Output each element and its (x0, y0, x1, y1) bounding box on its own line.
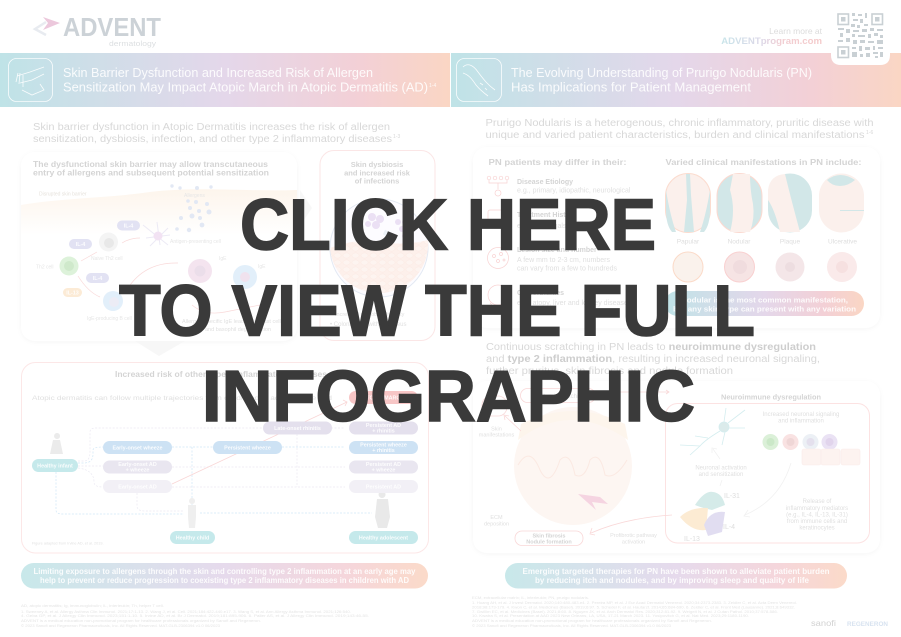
keratinocytes (802, 449, 860, 465)
pill: persistent AD + wheeze: + wheeze (372, 468, 395, 474)
pill: early-onset wheeze: Early-onset wheeze (112, 446, 163, 452)
pill: healthy infant: Healthy infant (37, 464, 73, 470)
bullets (330, 312, 406, 328)
cytokine clusters (680, 492, 740, 543)
label: ECM deposition: deposition (484, 522, 509, 528)
pill: late-onset rhinitis (263, 422, 332, 434)
figure: adolescent (375, 491, 390, 528)
panel: skin dysbiosis (320, 150, 435, 340)
intro: Atopic dermatitis can follow multiple trajectories from childhood to adolescence and (32, 395, 332, 402)
item: disease etiology (517, 179, 631, 194)
heading: and increased risk (344, 168, 411, 178)
item: lesion size (517, 247, 617, 272)
pill: skin manifestations marker (482, 396, 507, 416)
label: release of mediators: (e.g., IL-4, IL-13, IL-31) (786, 512, 848, 518)
pill: persistent AD + rhinitis: Persistent AD (366, 423, 401, 429)
pill: healthy child: Healthy child (176, 536, 209, 542)
pill: early-onset AD + wheeze: + wheeze (126, 468, 149, 474)
label: increased signaling: Increased neuronal signaling (763, 412, 839, 418)
allergens (170, 184, 213, 232)
overlay headline: click here to view the full infographic: INFOGRAPHIC (202, 357, 695, 437)
pill: skin fibrosis (515, 531, 583, 546)
figure: child (188, 498, 196, 528)
callout: left takeaway: Limiting exposure to allergens through the skin and controlling type 2 inflammation at an early age may (34, 566, 416, 576)
icon: treatment history (488, 210, 508, 224)
item: treatment history (517, 212, 595, 230)
banner: skin barrier: 1-4 (429, 83, 436, 89)
item: lesion size: A few mm to 2-3 cm, numbers (517, 257, 610, 264)
bullets: Increased microbial diversity (335, 312, 405, 318)
footer: right references: 1. Huang AH, et al. J Invest Dermatol. 2020;140:480-483.e4. 2. Pereira MP, et al. J Eur Acad Dermatol Venereol. 2020;34:2373-2383. 3. Zeidler C, et al. Acta Derm Venereol. (472, 601, 797, 605)
photo: plaque (768, 174, 812, 232)
pill: healthy child (170, 531, 215, 544)
labels: manifestation types: Ulcerative (828, 238, 857, 246)
learn more link: ADVENTprogram.com (721, 36, 822, 47)
overlay headline: click here to view the full infographic: CLICK HERE (240, 186, 656, 266)
panel: atopic march (22, 362, 428, 553)
footer: right references: 7. Gwillim EC, et al. Medicines (Basel). 2021;8:60. 8. Nguyen JK, et al. Arch Dermatol Res. 2020;312:81-92. 9. Weigelt N, et al. J Cutan Pathol. 2010;37:578-586. (472, 610, 778, 614)
caption: degranulation (182, 319, 281, 333)
pill: persistent AD + rhinitis: + rhinitis (372, 428, 395, 434)
heading: patients differ: PN patients may differ in their: (488, 158, 626, 167)
label: disrupted skin barrier: Disrupted skin barrier (39, 192, 87, 198)
heading: neuroimmune dysregulation: Neuroimmune dysregulation (721, 392, 821, 402)
footer: right references: ECM, extracellular matrix; IL, interleukin; PN, prurigo nodularis. (472, 596, 589, 600)
cytokine clusters: IL-31 (724, 493, 740, 500)
heading: of infections (355, 176, 399, 186)
label: neuronal activation (695, 466, 747, 478)
pill: persistent wheeze + rhinitis: Persistent wheeze (360, 442, 407, 448)
intro text: prurigo nodularis: unique and varied patient characteristics, burden and clinical manifestations (486, 130, 864, 141)
pill: nodular note: Nodular is the most common manifestation, (681, 296, 848, 304)
item: comorbidities (517, 290, 632, 307)
label: release of mediators: inflammatory mediators (786, 506, 848, 512)
top pill: itch-scratch (520, 388, 596, 402)
mast cell and basophil: IgE (258, 264, 266, 270)
labels: manifestation types: Plaque (780, 238, 800, 246)
label: profibrotic: Profibrotic pathway (610, 533, 657, 539)
pill: persistent AD (349, 480, 418, 493)
cytokine clusters: IL-4 (723, 524, 735, 531)
pill: nodular note (665, 291, 864, 316)
banner: skin barrier (0, 53, 450, 107)
label: skin manifestations: Skin (491, 426, 502, 432)
label: release of mediators: Release of (803, 499, 832, 505)
heading: Skin dysbiosis (351, 160, 403, 169)
text block: continuous scratching: further pruritus, skin fibrosis and nodule formation (486, 366, 733, 377)
footer: left references (21, 604, 369, 628)
arrows: neuro (712, 448, 791, 517)
item: disease etiology: Disease Etiology (517, 179, 573, 186)
pill: healthy infant (32, 459, 78, 472)
label: profibrotic (610, 533, 657, 546)
banner: prurigo nodularis: Has Implications for Patient Management (511, 80, 751, 94)
footer: right references (472, 596, 797, 628)
IL-4 tags: IL-4 (76, 242, 85, 248)
skin microbiome circle (330, 199, 428, 297)
photo: ulcerative (819, 174, 864, 232)
heading: Increased risk of other type 2 inflammatory diseases (115, 370, 328, 379)
label: skin manifestations: manifestations (479, 432, 514, 438)
item: lesion size: Lesion size and number (517, 247, 597, 254)
label: release of mediators: from immune cells and (787, 519, 847, 525)
labels: manifestation types: Nodular (728, 238, 751, 246)
footer: left references: AD, atopic dermatitis; Ig, immunoglobulin; IL, interleukin; Th, helper T cell. (21, 604, 164, 608)
callout: right takeaway (505, 563, 847, 588)
labels: manifestation types: Papular (677, 238, 700, 246)
mast cell and basophil (188, 256, 266, 289)
panel: transcutaneous sensitization (21, 152, 312, 341)
flow lines (56, 400, 372, 514)
label: neuronal activation: Neuronal activation (695, 466, 747, 472)
label: increased signaling (763, 412, 839, 424)
caption: degranulation: Allergen-specific IgE leading to mast cell (182, 319, 281, 325)
intro text: atopic dermatitis (33, 122, 400, 145)
label: neuronal activation: and sensitization (699, 472, 743, 478)
pill: late-onset rhinitis: Late-onset rhinitis (274, 426, 321, 432)
labels: manifestation types (677, 238, 857, 246)
footer: left references: 1. Sweeney A, et al. Allergy Asthma Clin Immunol. 2021;17:1-13. 2. Wang J, et al. Cell. 2021;184:422-440.e17. 3. Wang S, et al. Ann Allergy Asthma Immunol. 2021;126:540. (21, 610, 351, 614)
pill: skin fibrosis: Skin fibrosis (532, 534, 566, 540)
footer: left references: 4. Geba GP, et al. J Allergy Clin Immunol. 2023;151:1-10. 5. Irvine AD, et al. Br J Dermatol. 2019;181:895-906. 6. Paller AS, et al. J Allergy Clin Immunol. 2019;143:46-55. (21, 614, 369, 618)
allergens: Allergens (184, 193, 205, 199)
panel: neuroimmune (473, 381, 880, 553)
label: skin manifestations (479, 426, 514, 438)
intro text: prurigo nodularis: Prurigo Nodularis is a heterogenous, chronic inflammatory, pruritic disease with (486, 118, 874, 129)
intro text: atopic dermatitis: Skin barrier dysfunction in Atopic Dermatitis increases the risk of allergen (33, 122, 390, 133)
banner: prurigo nodularis (451, 53, 901, 107)
pill: early-onset AD + wheeze: Early-onset AD (118, 462, 157, 468)
intro text: atopic dermatitis: sensitization, dysbiosis, infection, and other type 2 inflammatory diseases (33, 134, 392, 145)
heading: clinical manifestations: Varied clinical manifestations in PN include: (666, 158, 862, 167)
text block: continuous scratching: and type 2 inflammation , resulting in increased neuronal signaling, (486, 354, 820, 365)
icon: hand scratching arm (8, 58, 52, 102)
antigen-presenting cell (143, 222, 221, 246)
logo: Regeneron: REGENERON (847, 622, 888, 628)
footer: right references: 10. Kwatra S, et al. Presentation at AAD 2023 New Orleans, LA, USA, 17-21 March 2023. 11. Yosipovitch G, et al. Nat Med. 2023;29:1180-1190. (472, 614, 749, 618)
pill: persistent wheeze + rhinitis: + rhinitis (372, 448, 395, 454)
mast cell and basophil: IgE (219, 256, 227, 262)
logo: ADVENT dermatology: dermatology (109, 39, 156, 48)
IgE-producing B cell (87, 291, 132, 322)
icon: arm with nodules (456, 58, 502, 102)
label: ECM deposition: ECM (490, 515, 503, 521)
panel heading: The dysfunctional skin barrier may allow transcutaneous (33, 160, 269, 169)
cytokine clusters: IL-13 (684, 536, 700, 543)
label: profibrotic: activation (622, 540, 645, 546)
footer: left references: ADVENT is a medical education non-promotional program for healthcare professionals organized by Sanofi and Regeneron. (21, 619, 261, 623)
item: comorbidities: Comorbidities (517, 290, 564, 297)
logo: sanofi: sanofi (811, 618, 836, 628)
pill: persistent AD + wheeze: Persistent AD (366, 462, 401, 468)
immune cells (762, 434, 838, 450)
naive Th2 cell (91, 232, 123, 262)
item: disease etiology: e.g., primary, idiopathic, neurological (517, 188, 631, 194)
arrow: to dysbiosis (300, 190, 312, 226)
label: ECM deposition (484, 515, 509, 528)
neuron (680, 408, 745, 455)
text block: continuous scratching: Continuous scratching in PN leads to neuroimmune dysregulation (486, 342, 816, 353)
callout: left takeaway: help to prevent or reduce progression to coexisting type 2 inflammatory diseases in children with AD (40, 575, 409, 585)
logo: ADVENT dermatology: ADVENT (63, 12, 161, 42)
icon: comorbidities (488, 285, 508, 312)
callout: right takeaway: by reducing itch and nodules, and by improving sleep and quality of life (535, 575, 809, 585)
callout: left takeaway (21, 563, 428, 588)
panel heading: entry of allergens and subsequent potential sensitization (33, 168, 269, 178)
item: treatment history: e.g., antifungals, steroids (517, 223, 595, 230)
pill: nodular note: but any skin type can present with any variation (673, 304, 856, 314)
overlay headline: click here to view the full infographic: TO VIEW THE FULL (119, 272, 755, 352)
arrows (78, 238, 260, 313)
top pill: itch-scratch: Pruritus / Scratching (531, 394, 585, 400)
intro text: prurigo nodularis: 1-6 (866, 130, 873, 136)
pill: healthy adolescent (349, 531, 418, 544)
label: release of mediators (786, 499, 848, 532)
figure: infant (50, 433, 63, 454)
overlay headline: click here to view the full infographic (119, 186, 755, 437)
label: release of mediators: keratinocytes (799, 526, 835, 532)
pill: atopic march: ATOPIC MARCH (363, 396, 404, 402)
pill: persistent AD + wheeze (349, 460, 418, 474)
bullets: • Colonization with S. aureus (330, 322, 406, 328)
Th2 cell (36, 256, 78, 276)
antigen-presenting cell: Antigen-presenting cell (170, 239, 221, 245)
panel heading (33, 160, 269, 178)
pill: persistent wheeze: Persistent wheeze (224, 446, 271, 452)
pill: early-onset AD: Early-onset AD (118, 484, 157, 490)
item: comorbidities: e.g., atopy, liver and kidney diseases (517, 300, 632, 307)
label: increased signaling: and inflammation (778, 418, 824, 424)
pill: atopic march (349, 391, 418, 404)
arrow: down to comorbidities (135, 341, 185, 356)
pill: persistent AD: Persistent AD (366, 484, 401, 490)
heading (344, 160, 411, 186)
item: lesion size: can vary from a few to hundreds (517, 266, 617, 272)
learn more link: Learn more at (769, 26, 823, 36)
banner: skin barrier: Skin Barrier Dysfunction and Increased Risk of Allergen (63, 65, 373, 80)
IgE-producing B cell: IgE-producing B cell (87, 316, 132, 322)
QR code (831, 0, 890, 65)
footer: right references: ADVENT is a medical education non-promotional program for healthcare professionals organized by Sanofi and Regeneron. (472, 619, 712, 623)
callout: right takeaway: Emerging targeted therapies for PN have been shown to alleviate patient burden (522, 566, 830, 576)
item: treatment history: Treatment History (517, 212, 577, 219)
panel: red outline (666, 404, 870, 543)
pill: persistent wheeze + rhinitis (349, 441, 418, 454)
skin cross-section circle (514, 407, 632, 525)
pill: skin fibrosis: Nodule formation (526, 540, 572, 546)
footer: right references: 2018;98:173-179. 4. Kwon C, et al. Medicines (Basel). 2019;6:97. 5. Schedel F, et al. Hautarzt. 2014;65:684-690. 6. Zeidler C, et al. Front Med (Lausanne). 2021;8:649332. (472, 606, 795, 610)
pill: persistent wheeze (213, 441, 282, 454)
banner: prurigo nodularis: The Evolving Understanding of Prurigo Nodularis (PN) (511, 65, 812, 80)
learn more link (721, 26, 823, 47)
pill: early-onset AD (103, 480, 172, 493)
intro text: prurigo nodularis (486, 118, 874, 141)
pill: healthy adolescent: Healthy adolescent (359, 536, 408, 542)
pill: early-onset wheeze (103, 441, 172, 454)
IL-4 tags: IL-4 (124, 224, 133, 230)
intro text: atopic dermatitis: 1-3 (393, 134, 400, 140)
pill: persistent AD + rhinitis (349, 422, 418, 434)
photos: lesions close-up (673, 252, 857, 282)
skin layer (21, 189, 297, 235)
text block: continuous scratching (486, 342, 820, 377)
arrow: top (595, 390, 669, 394)
figure source: Figure adapted from Irvine AD, et al. 2019. (32, 542, 104, 546)
footer: left references: © 2023 Sanofi and Regeneron Pharmaceuticals, Inc. All Rights Reserved. MAT-GLB-2306394 v1.0 06/2023 (21, 624, 220, 628)
pill: early-onset AD + wheeze (103, 460, 172, 474)
footer: right references: © 2023 Sanofi and Regeneron Pharmaceuticals, Inc. All Rights Reserved. MAT-GLB-2306394 v1.0 06/2023 (472, 624, 671, 628)
icon: lesion size (488, 248, 508, 268)
Th2 cell: Th2 cell (36, 264, 54, 270)
photo: papular (666, 174, 710, 232)
icon: disease etiology (487, 176, 509, 196)
IL-4 tags: IL-4 (93, 276, 102, 282)
photo: nodular (717, 174, 762, 232)
panel: PN characteristics (473, 147, 880, 328)
IL-4 tags: IL-13 (66, 290, 79, 296)
logo: ADVENT dermatology (35, 12, 161, 48)
caption: degranulation: and basophil degranulation (205, 327, 271, 333)
IL-4 tags (63, 220, 140, 297)
banner: skin barrier: Sensitization May Impact Atopic March in Atopic Dermatitis (AD) (63, 80, 428, 94)
naive Th2 cell: Naive Th2 cell (91, 256, 123, 262)
arrows: fibrosis path (504, 415, 672, 535)
